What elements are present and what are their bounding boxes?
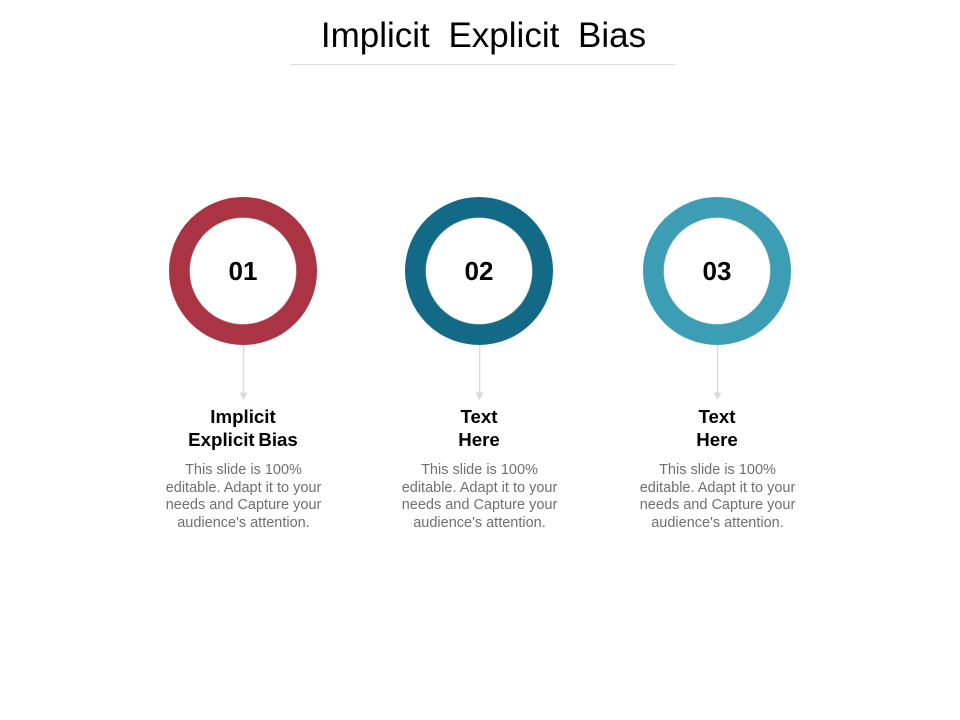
- ring 03: 03: [703, 256, 731, 286]
- text 01: editable. Adapt it to your: [166, 480, 321, 496]
- text 03: audience's attention.: [651, 515, 784, 531]
- text 01: [166, 462, 322, 531]
- text 03: editable. Adapt it to your: [640, 480, 795, 496]
- text 02: editable. Adapt it to your: [402, 480, 557, 496]
- arrow 03: [714, 345, 722, 400]
- heading 03: Text: [698, 406, 736, 427]
- text 03: [640, 462, 796, 531]
- ring 01: [179, 207, 307, 335]
- text 03: needs and Capture your: [640, 497, 795, 513]
- arrow 02: [476, 345, 484, 400]
- text 02: [402, 462, 558, 531]
- heading 01: Implicit: [210, 406, 276, 427]
- text 01: audience's attention.: [177, 515, 310, 531]
- ring 02: 02: [465, 256, 493, 286]
- text 01: needs and Capture your: [166, 497, 321, 513]
- arrow 01: [240, 345, 248, 400]
- title: Implicit Explicit Bias: [321, 16, 646, 54]
- text 01: This slide is 100%: [185, 462, 302, 478]
- title underline: [290, 64, 675, 65]
- ring 02: [415, 207, 543, 335]
- heading 03: [696, 406, 738, 450]
- text 02: This slide is 100%: [421, 462, 538, 478]
- text 02: needs and Capture your: [402, 497, 557, 513]
- text 03: This slide is 100%: [659, 462, 776, 478]
- heading 02: Here: [458, 429, 500, 450]
- heading 01: Explicit Bias: [188, 429, 298, 450]
- ring 01: 01: [229, 256, 257, 286]
- heading 01: [188, 406, 298, 450]
- ring 03: [653, 207, 781, 335]
- heading 03: Here: [696, 429, 738, 450]
- heading 02: [458, 406, 500, 450]
- text 02: audience's attention.: [413, 515, 546, 531]
- heading 02: Text: [460, 406, 498, 427]
